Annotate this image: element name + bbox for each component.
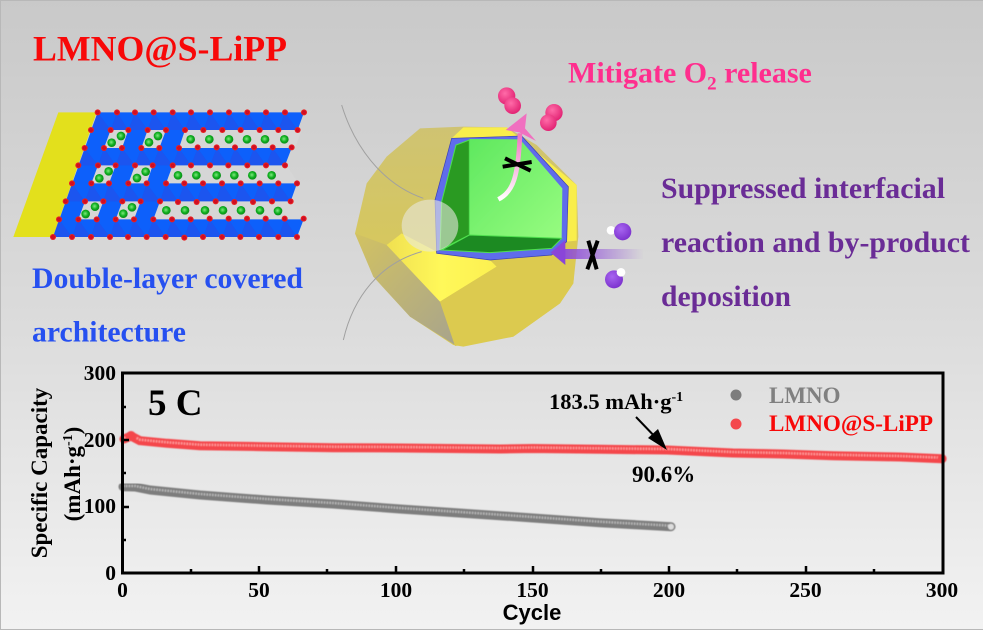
- y-axis labels: 0: [105, 561, 116, 585]
- y-axis title: Specific Capacity: [27, 387, 52, 558]
- plot frame and ticks: [122, 373, 943, 573]
- caption: double-layer architecture: Double-layer covered: [32, 262, 303, 295]
- x-axis labels: 200: [653, 578, 685, 602]
- y-axis labels: 300: [84, 361, 116, 385]
- label: mitigate O2 release: release: [717, 56, 812, 89]
- capacity annotation: 183.5 mAh·g: [549, 389, 672, 414]
- diagram: double-layer lattice: [13, 109, 307, 241]
- label: suppressed interfacial reaction: reaction and by-product: [661, 226, 970, 259]
- water molecules: [605, 223, 631, 288]
- red data series: [124, 431, 946, 463]
- label: mitigate O2 release: Mitigate O: [568, 56, 707, 89]
- caption: double-layer architecture: [32, 262, 303, 349]
- O2 molecules: [498, 87, 563, 131]
- x-axis labels: 100: [380, 578, 412, 602]
- x-axis labels: 150: [516, 578, 549, 602]
- oxygen release arrow: [498, 113, 536, 199]
- chart: specific capacity vs cycle: [27, 361, 958, 625]
- title: LMNO@S-LiPP: [33, 28, 287, 68]
- x-axis labels: [117, 578, 958, 602]
- y-axis labels: 100: [84, 494, 116, 518]
- y-axis title: [27, 387, 85, 558]
- x-axis labels: 50: [248, 578, 270, 602]
- legend: LMNO@S-LiPP: [769, 411, 933, 437]
- particle shell: [342, 105, 578, 347]
- cutaway coating and core: [435, 136, 568, 260]
- legend: [730, 383, 933, 437]
- y-axis labels: 200: [84, 428, 116, 452]
- label: suppressed interfacial reaction: Suppressed interfacial: [661, 172, 945, 205]
- x-axis labels: 250: [789, 578, 822, 602]
- label: suppressed interfacial reaction: deposition: [661, 280, 791, 313]
- y-axis title: (mAh·g: [60, 446, 85, 521]
- rate label: 5 C: [148, 383, 202, 424]
- legend: LMNO: [769, 383, 841, 408]
- x-axis labels: 300: [926, 578, 958, 602]
- y-axis title: ): [60, 427, 85, 434]
- x-axis labels: 0: [117, 578, 128, 602]
- translucent magnifier circle: [402, 200, 458, 252]
- capacity annotation: [549, 389, 695, 487]
- diagram: coated particle cutaway: [342, 87, 643, 347]
- blocked by-product arrow: [551, 240, 643, 269]
- grey data series: [123, 486, 674, 530]
- capacity annotation: -1: [672, 390, 683, 405]
- x-axis title: Cycle: [503, 600, 561, 625]
- y-axis title: -1: [61, 434, 76, 446]
- capacity annotation: 90.6%: [632, 462, 695, 487]
- label: suppressed interfacial reaction: [661, 172, 970, 313]
- label: mitigate O2 release: 2: [707, 73, 717, 94]
- caption: double-layer architecture: architecture: [32, 316, 186, 349]
- y-axis labels: [84, 361, 116, 585]
